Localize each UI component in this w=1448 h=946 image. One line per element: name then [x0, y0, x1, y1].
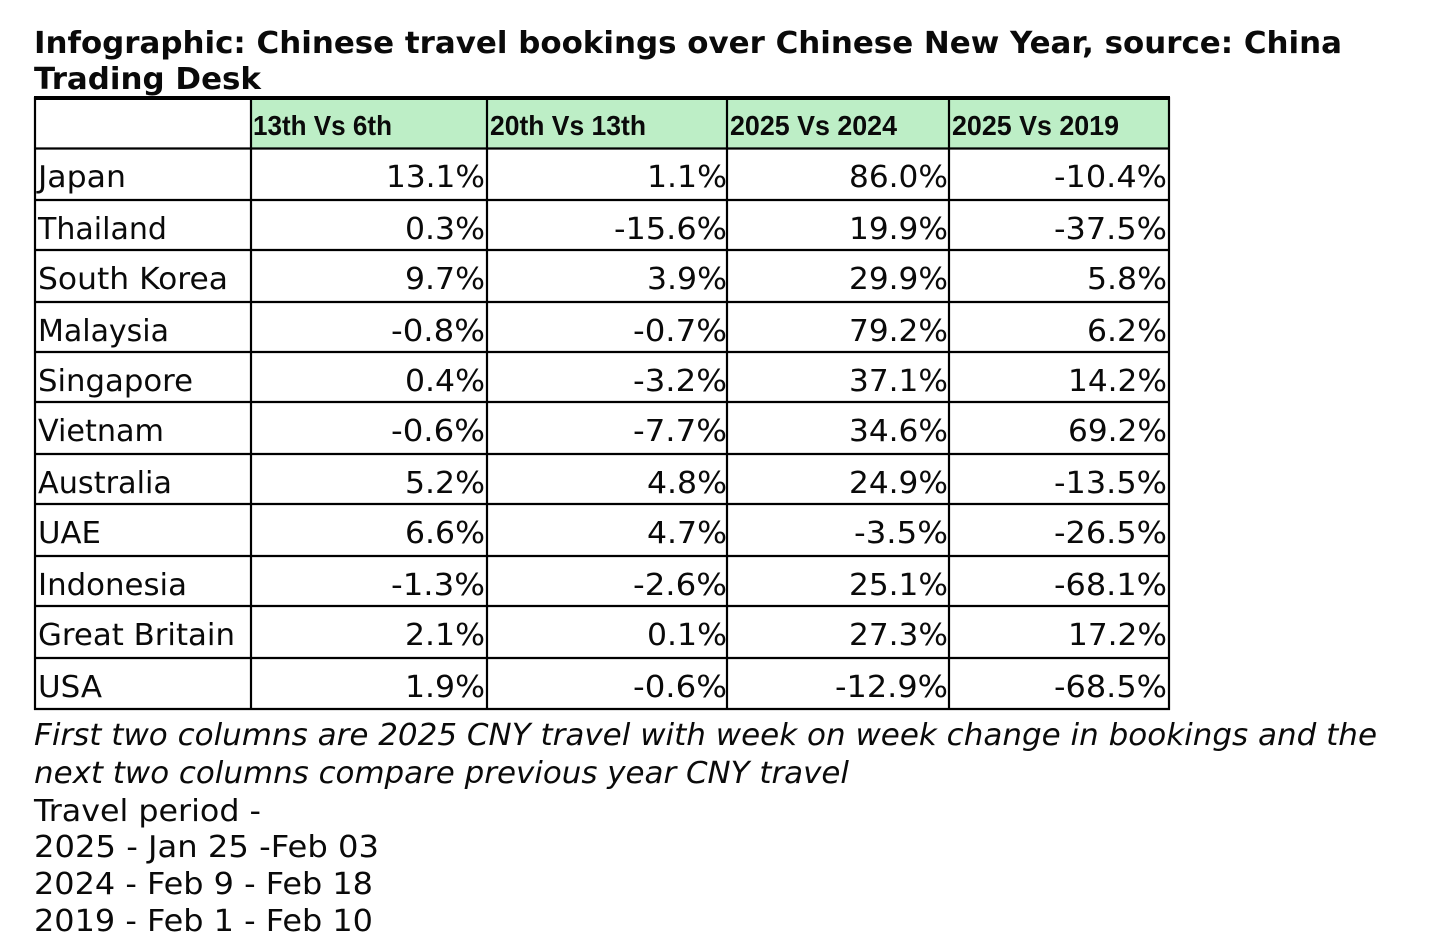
row: USA: USA — [38, 670, 102, 705]
row: Singapore: 37.1% — [849, 364, 948, 399]
row: Singapore — [38, 364, 1167, 399]
row: Great Britain: 2.1% — [405, 618, 485, 653]
row: South Korea: 9.7% — [405, 262, 485, 297]
row: Thailand — [37, 212, 1167, 247]
title: Infographic: Chinese travel bookings over Chinese New Year, source: China — [34, 26, 1342, 61]
row: UAE: 4.7% — [647, 516, 727, 551]
row: Thailand: -15.6% — [614, 212, 727, 247]
row: USA: 1.9% — [405, 670, 485, 705]
italic explanatory note — [34, 718, 1377, 791]
row: Australia: -13.5% — [1054, 466, 1167, 501]
row: Vietnam — [38, 414, 1167, 449]
title — [34, 26, 1342, 97]
row: USA: -12.9% — [835, 670, 948, 705]
row: South Korea: South Korea — [38, 262, 228, 297]
row: South Korea: 3.9% — [647, 262, 727, 297]
row: Great Britain: Great Britain — [38, 618, 235, 653]
row: UAE — [38, 516, 1167, 551]
row: South Korea: 5.8% — [1087, 262, 1167, 297]
row: Great Britain: 0.1% — [647, 618, 727, 653]
row: Singapore: 0.4% — [405, 364, 485, 399]
title: Trading Desk — [34, 62, 262, 97]
travel period list: Travel period - — [33, 794, 261, 829]
row: Vietnam: 69.2% — [1068, 414, 1167, 449]
row: Japan: 1.1% — [647, 160, 727, 195]
row: Malaysia: 79.2% — [849, 314, 948, 349]
row: Great Britain: 17.2% — [1068, 618, 1167, 653]
row: Indonesia: -2.6% — [633, 568, 727, 603]
table header row: 2025 Vs 2019 — [952, 110, 1119, 141]
row: Malaysia: -0.8% — [391, 314, 485, 349]
travel period list — [33, 794, 379, 939]
row: Japan: 13.1% — [386, 160, 485, 195]
row: Indonesia: -1.3% — [391, 568, 485, 603]
row: Malaysia: -0.7% — [633, 314, 727, 349]
row: Malaysia: 6.2% — [1087, 314, 1167, 349]
row: Indonesia: 25.1% — [849, 568, 948, 603]
row: UAE: UAE — [38, 516, 101, 551]
row: Great Britain — [38, 618, 1167, 653]
row: USA: -0.6% — [633, 670, 727, 705]
data table — [34, 96, 1170, 710]
italic explanatory note: First two columns are 2025 CNY travel with week on week change in bookings and the — [34, 718, 1377, 753]
row: UAE: 6.6% — [405, 516, 485, 551]
row: Great Britain: 27.3% — [849, 618, 948, 653]
row: Vietnam: Vietnam — [38, 414, 164, 449]
row: Australia: 5.2% — [405, 466, 485, 501]
row: South Korea: 29.9% — [849, 262, 948, 297]
row: Japan: Japan — [36, 160, 126, 195]
row: Singapore: 14.2% — [1068, 364, 1167, 399]
italic explanatory note: next two columns compare previous year CNY travel — [34, 756, 850, 791]
row: Vietnam: 34.6% — [849, 414, 948, 449]
row: Indonesia: Indonesia — [38, 568, 187, 603]
travel period list: 2024 - Feb 9 - Feb 18 — [34, 867, 373, 902]
row: Thailand: -37.5% — [1054, 212, 1167, 247]
table grid lines — [34, 96, 1170, 710]
travel period list: 2019 - Feb 1 - Feb 10 — [34, 904, 373, 939]
row: Thailand: Thailand — [37, 212, 167, 247]
table header row: 2025 Vs 2024 — [730, 110, 897, 141]
row: Indonesia — [38, 568, 1167, 603]
table header row: 13th Vs 6th — [253, 110, 392, 141]
row: UAE: -3.5% — [854, 516, 948, 551]
row: Japan: -10.4% — [1054, 160, 1167, 195]
row: South Korea — [38, 262, 1167, 297]
row: Vietnam: -7.7% — [633, 414, 727, 449]
row: Singapore: Singapore — [38, 364, 193, 399]
row: USA: -68.5% — [1054, 670, 1167, 705]
row: Australia — [38, 466, 1167, 501]
row: Thailand: 19.9% — [849, 212, 948, 247]
row: Malaysia — [38, 314, 1167, 349]
row: Thailand: 0.3% — [405, 212, 485, 247]
table header row: 20th Vs 13th — [490, 110, 646, 141]
row: Japan: 86.0% — [849, 160, 948, 195]
row: USA — [38, 670, 1167, 705]
table header row — [251, 99, 1169, 148]
row: Indonesia: -68.1% — [1054, 568, 1167, 603]
row: Japan — [36, 160, 1167, 195]
row: Australia: Australia — [38, 466, 172, 501]
row: UAE: -26.5% — [1054, 516, 1167, 551]
travel period list: 2025 - Jan 25 -Feb 03 — [34, 830, 379, 865]
row: Vietnam: -0.6% — [391, 414, 485, 449]
row: Australia: 24.9% — [849, 466, 948, 501]
row: Singapore: -3.2% — [633, 364, 727, 399]
row: Malaysia: Malaysia — [38, 314, 169, 349]
row: Australia: 4.8% — [647, 466, 727, 501]
